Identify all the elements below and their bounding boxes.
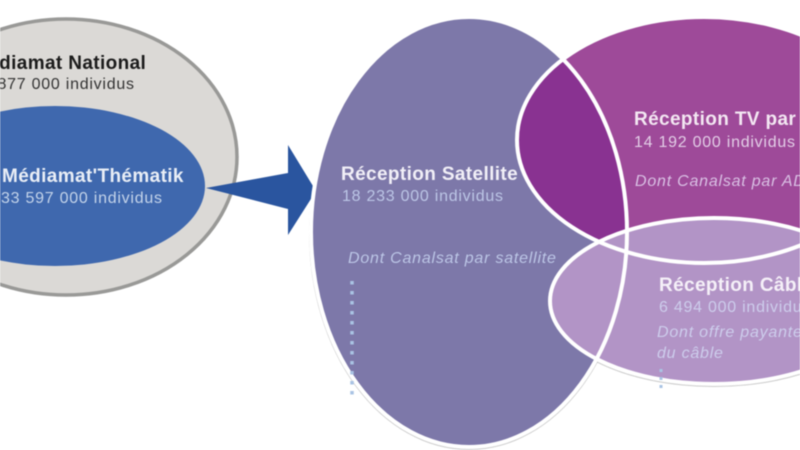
heading: Médiamat'Thématik: Médiamat'Thématik [2,166,184,187]
panel: Médiamat National [0,19,237,295]
dotted line: satellite [350,281,354,398]
text: TV count: 14 192 000 individus [634,134,796,151]
text: thematic count: 33 597 000 individus [1,190,163,207]
panel: reception Venn diagram [309,17,800,450]
ellipse: TV by ADSL [517,17,800,263]
ellipse: thematic population [0,106,205,266]
ellipse: cable [550,218,800,384]
text: cable offer note second line: du câble [657,345,724,362]
text: cable offer note: Dont offre payante [657,324,800,341]
text: Canalsat satellite note: Dont Canalsat par satellite [348,250,557,267]
panel: Médiamat'Thématik [0,106,205,266]
ellipse: national population [0,19,237,295]
arrow [206,145,316,235]
heading: satellite: Réception Satellite [341,164,518,185]
overlap: satellite and TV [519,62,625,240]
ellipse: satellite [311,17,627,447]
outlines [311,17,800,447]
text: satellite count: 18 233 000 individus [342,188,504,205]
dotted line: cable [660,369,662,392]
